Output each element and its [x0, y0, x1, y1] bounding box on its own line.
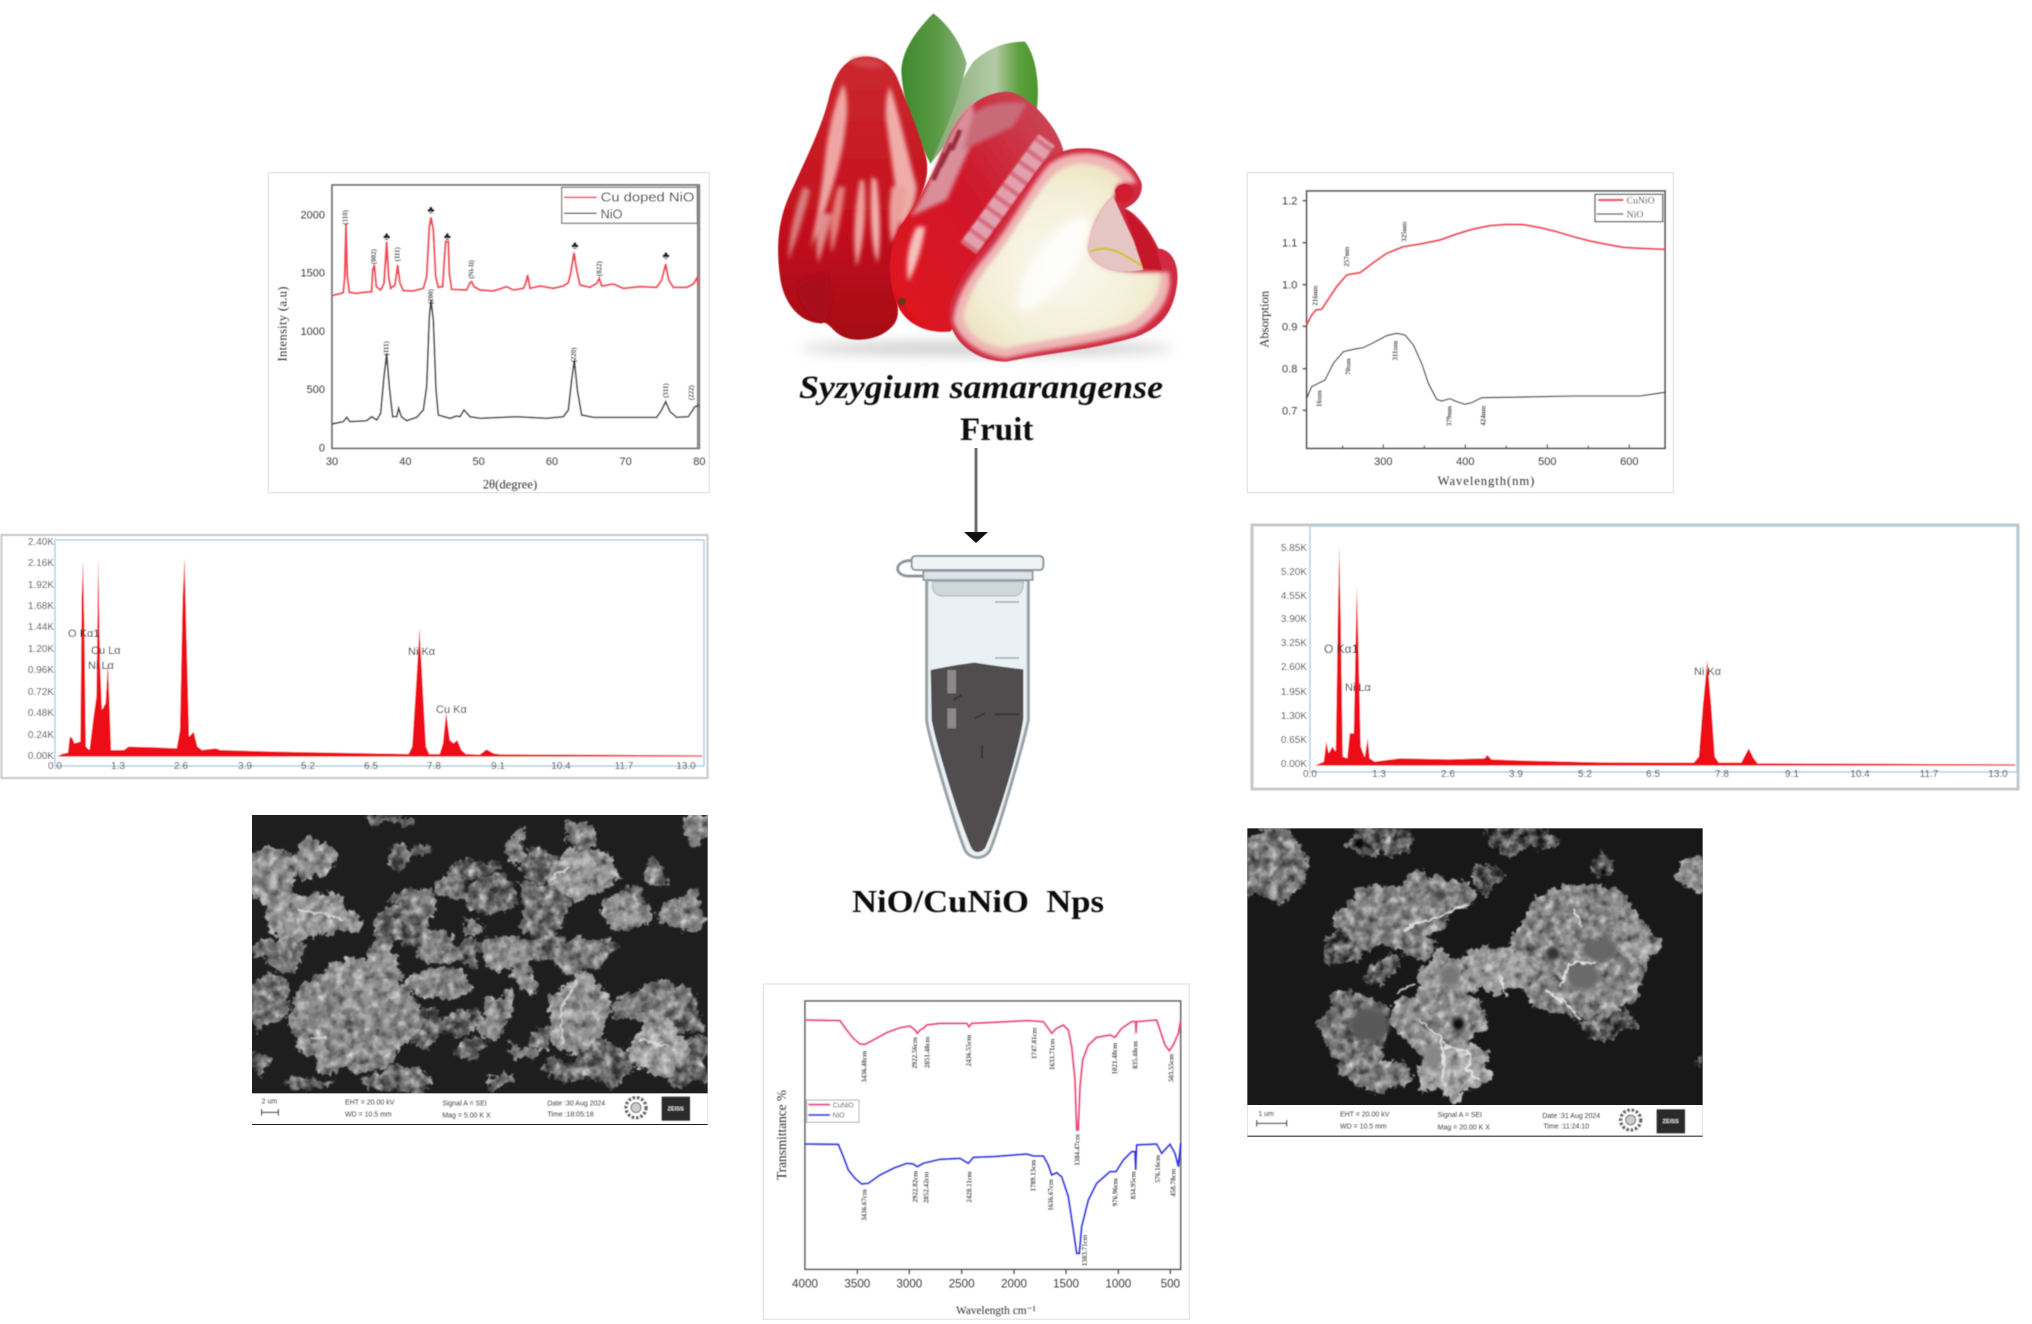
- panel: EDS spectrum of CuNiO: 2.16K: [28, 558, 54, 569]
- panel: UV-Vis absorption chart: Wavelength(nm): [1438, 474, 1534, 488]
- panel: XRD pattern chart: 1500: [301, 268, 325, 280]
- panel: EDS spectrum of CuNiO: 1.92K: [28, 580, 54, 591]
- panel: SEM micrograph of CuNiO: Mag = 5.00 K X: [442, 1112, 491, 1119]
- panel: UV-Vis absorption chart: 325nm: [1401, 221, 1409, 242]
- panel: EDS spectrum of NiO: 1.3: [1372, 769, 1386, 780]
- panel: XRD pattern chart: Cu doped NiO: [601, 191, 695, 205]
- panel: EDS spectrum of CuNiO: Cu Kα: [436, 704, 467, 716]
- panel: EDS spectrum of CuNiO: 0.24K: [28, 730, 54, 741]
- panel: UV-Vis absorption chart: 1.2: [1282, 196, 1297, 208]
- panel: SEM micrograph of NiO: Date :31 Aug 2024: [1542, 1113, 1600, 1120]
- panel: SEM micrograph of CuNiO: Time :18:05:18: [547, 1111, 594, 1118]
- heading: species name: Syzygium samarangense: [799, 370, 1163, 406]
- panel: XRD pattern chart: (111): [393, 246, 401, 262]
- panel: FTIR transmittance chart: 3000: [896, 1277, 923, 1290]
- panel: EDS spectrum of NiO: 11.7: [1920, 769, 1939, 780]
- panel: UV-Vis absorption chart: 0.9: [1282, 321, 1297, 333]
- panel: XRD pattern chart: NiO: [601, 207, 623, 221]
- panel: EDS spectrum of CuNiO: 13.0: [676, 761, 696, 772]
- panel: EDS spectrum of NiO: 3.90K: [1281, 614, 1307, 625]
- panel: EDS spectrum of NiO: Ni Lα: [1345, 682, 1372, 694]
- panel: EDS spectrum of CuNiO: 5.2: [301, 761, 315, 772]
- panel: EDS spectrum of NiO: 10.4: [1850, 769, 1870, 780]
- panel: XRD pattern chart: 60: [546, 456, 558, 468]
- panel: FTIR transmittance chart: 2500: [949, 1277, 975, 1290]
- panel: SEM micrograph of CuNiO: Date :30 Aug 2024: [547, 1101, 605, 1108]
- panel: EDS spectrum of CuNiO: 1.3: [111, 761, 125, 772]
- panel: EDS spectrum of CuNiO: 0.96K: [28, 665, 54, 676]
- panel: FTIR transmittance chart: 500: [1161, 1277, 1181, 1290]
- panel: EDS spectrum of NiO: 5.20K: [1281, 567, 1307, 578]
- panel: XRD pattern chart: ♣: [662, 250, 670, 262]
- panel: XRD pattern chart: Intensity (a.u): [276, 286, 290, 361]
- panel: EDS spectrum of CuNiO: 10.4: [551, 761, 571, 772]
- green leaves: [901, 13, 1038, 164]
- panel: UV-Vis absorption chart: 70nm: [1345, 358, 1353, 375]
- panel: EDS spectrum of CuNiO: Ni Lα: [88, 660, 115, 672]
- panel: XRD pattern chart: (200): [427, 288, 435, 304]
- panel: XRD pattern chart: ♣: [427, 204, 435, 216]
- panel: XRD pattern chart: 80: [693, 456, 705, 468]
- panel: UV-Vis absorption chart: 500: [1538, 456, 1556, 468]
- panel: FTIR transmittance chart: [763, 984, 1189, 1319]
- panel: FTIR transmittance chart: 458.78cm: [1169, 1168, 1177, 1197]
- panel: FTIR transmittance chart: 2852.42cm: [923, 1171, 931, 1203]
- panel: XRD pattern chart: [268, 173, 709, 493]
- panel: UV-Vis absorption chart: CuNiO: [1627, 196, 1655, 207]
- panel: FTIR transmittance chart: Wavelength cm⁻¹: [956, 1305, 1036, 1317]
- panel: FTIR transmittance chart: 3436.67cm: [860, 1189, 868, 1221]
- panel: SEM micrograph of CuNiO: EHT = 20.00 kV: [345, 1100, 395, 1107]
- icon: tube with NiO/CuNiO powder: [898, 556, 1043, 857]
- panel: EDS spectrum of NiO: 2.6: [1441, 769, 1455, 780]
- panel: EDS spectrum of CuNiO: 0.00K: [28, 751, 54, 762]
- panel: UV-Vis absorption chart: 600: [1620, 456, 1638, 468]
- panel: EDS spectrum of CuNiO: 7.8: [427, 761, 441, 772]
- panel: SEM micrograph of CuNiO: ZEISS: [667, 1106, 684, 1112]
- panel: FTIR transmittance chart: 1789.13cm: [1030, 1160, 1038, 1191]
- panel: EDS spectrum of NiO: Ni Kα: [1694, 666, 1722, 678]
- panel: XRD pattern chart: (022): [596, 260, 604, 276]
- panel: XRD pattern chart: (110): [341, 209, 349, 225]
- panel: XRD pattern chart: ♣: [383, 231, 391, 243]
- panel: EDS spectrum of NiO: 3.9: [1509, 769, 1523, 780]
- panel: UV-Vis absorption chart: 1.0: [1282, 280, 1297, 292]
- panel: EDS spectrum of NiO: 13.0: [1988, 769, 2008, 780]
- panel: XRD pattern chart: (222): [687, 384, 695, 400]
- arrow: fruit to nanoparticles: [964, 448, 988, 543]
- panel: EDS spectrum of NiO: 3.25K: [1281, 638, 1307, 649]
- panel: XRD pattern chart: (002): [370, 248, 378, 264]
- panel: SEM micrograph of CuNiO: Signal A = SEI: [442, 1100, 487, 1107]
- panel: XRD pattern chart: 2000: [301, 209, 325, 221]
- panel: SEM micrograph of CuNiO: [243, 813, 713, 1125]
- panel: FTIR transmittance chart: 4000: [792, 1277, 818, 1290]
- panel: FTIR transmittance chart: 2922.56cm: [911, 1037, 919, 1069]
- panel: EDS spectrum of CuNiO: 3.9: [238, 761, 252, 772]
- panel: FTIR transmittance chart: CuNiO: [833, 1102, 854, 1109]
- panel: FTIR transmittance chart: 1384.47cm: [1073, 1134, 1081, 1166]
- panel: FTIR transmittance chart: 976.96cm: [1112, 1178, 1120, 1206]
- panel: FTIR transmittance chart: 1633.71cm: [1048, 1038, 1056, 1070]
- panel: EDS spectrum of NiO: 1.30K: [1281, 711, 1307, 722]
- panel: SEM micrograph of CuNiO: 2 um: [262, 1098, 277, 1105]
- panel: EDS spectrum of CuNiO: 2.6: [174, 761, 188, 772]
- panel: UV-Vis absorption chart: 0.8: [1282, 364, 1297, 376]
- panel: UV-Vis absorption chart: 257nm: [1343, 246, 1351, 267]
- panel: FTIR transmittance chart: 1747.81cm: [1031, 1027, 1039, 1059]
- panel: EDS spectrum of CuNiO: 0.0: [48, 761, 62, 772]
- panel: XRD pattern chart: 0: [319, 442, 325, 454]
- panel: UV-Vis absorption chart: 300: [1374, 456, 1392, 468]
- panel: EDS spectrum of CuNiO: 6.5: [364, 761, 378, 772]
- panel: EDS spectrum of NiO: O Kα1: [1324, 642, 1359, 656]
- panel: SEM micrograph of NiO: Mag = 20.00 K X: [1438, 1124, 1490, 1131]
- panel: XRD pattern chart: (311): [662, 383, 670, 398]
- panel: EDS spectrum of NiO: [1252, 525, 2018, 789]
- heading: nanoparticle label: NiO/CuNiO Nps: [852, 883, 1104, 919]
- panel: FTIR transmittance chart: 1636.67cm: [1047, 1179, 1055, 1211]
- panel: EDS spectrum of CuNiO: Ni Kα: [408, 646, 436, 658]
- panel: EDS spectrum of CuNiO: 9.1: [491, 761, 505, 772]
- panel: EDS spectrum of NiO: 5.2: [1578, 769, 1592, 780]
- panel: UV-Vis absorption chart: [1247, 173, 1673, 493]
- panel: EDS spectrum of CuNiO: 0.72K: [28, 687, 54, 698]
- panel: EDS spectrum of CuNiO: O Kα1: [68, 628, 99, 640]
- panel: UV-Vis absorption chart: 311nm: [1391, 341, 1399, 361]
- panel: XRD pattern chart: 500: [307, 384, 325, 396]
- photo: Syzygium samarangense fruit: [778, 13, 1178, 362]
- panel: EDS spectrum of NiO: 0.0: [1303, 769, 1317, 780]
- panel: EDS spectrum of CuNiO: 11.7: [615, 761, 634, 772]
- panel: SEM micrograph of NiO: WD = 10.5 mm: [1340, 1124, 1387, 1131]
- panel: EDS spectrum of NiO: 1.95K: [1281, 687, 1307, 698]
- panel: UV-Vis absorption chart: 1.1: [1282, 238, 1297, 250]
- panel: XRD pattern chart: (111): [383, 340, 391, 356]
- panel: XRD pattern chart: ♣: [571, 240, 579, 252]
- panel: FTIR transmittance chart: 1500: [1053, 1277, 1079, 1290]
- panel: FTIR transmittance chart: 576.16cm: [1154, 1155, 1162, 1183]
- panel: SEM micrograph of NiO: [1233, 823, 1708, 1137]
- panel: XRD pattern chart: 2θ(degree): [483, 477, 537, 491]
- panel: EDS spectrum of NiO: 9.1: [1785, 769, 1799, 780]
- middle whole fruit: [890, 92, 1063, 332]
- panel: XRD pattern chart: 30: [326, 456, 338, 468]
- panel: SEM micrograph of NiO: ZEISS: [1662, 1119, 1679, 1125]
- panel: SEM micrograph of NiO: Time :11:24:10: [1543, 1124, 1589, 1131]
- panel: EDS spectrum of NiO: 7.8: [1715, 769, 1729, 780]
- panel: UV-Vis absorption chart: Absorption: [1257, 290, 1271, 348]
- panel: EDS spectrum of CuNiO: [2, 535, 708, 778]
- panel: EDS spectrum of NiO: 0.65K: [1281, 735, 1307, 746]
- cut fruit half: [948, 148, 1178, 362]
- panel: FTIR transmittance chart: Transmittance %: [774, 1090, 789, 1180]
- panel: FTIR transmittance chart: 2428.11cm: [965, 1171, 973, 1203]
- panel: EDS spectrum of CuNiO: 0.48K: [28, 708, 54, 719]
- panel: UV-Vis absorption chart: 216nm: [1311, 285, 1319, 306]
- panel: EDS spectrum of CuNiO: 2.40K: [28, 537, 54, 548]
- panel: XRD pattern chart: ♣: [444, 231, 452, 243]
- panel: SEM micrograph of NiO: EHT = 20.00 kV: [1340, 1112, 1390, 1119]
- heading: fruit label: Fruit: [960, 412, 1033, 448]
- panel: UV-Vis absorption chart: 16nm: [1315, 390, 1323, 407]
- panel: UV-Vis absorption chart: 424nm: [1479, 405, 1487, 426]
- panel: EDS spectrum of CuNiO: 1.20K: [28, 644, 54, 655]
- panel: EDS spectrum of CuNiO: 1.68K: [28, 601, 54, 612]
- panel: UV-Vis absorption chart: 0.7: [1282, 405, 1297, 417]
- ground shadow: [800, 341, 1173, 356]
- panel: UV-Vis absorption chart: 379nm: [1445, 406, 1453, 426]
- panel: FTIR transmittance chart: NiO: [833, 1113, 845, 1120]
- panel: XRD pattern chart: (220): [570, 347, 578, 363]
- panel: XRD pattern chart: (Ni-Ii): [467, 259, 475, 279]
- panel: FTIR transmittance chart: 2000: [1001, 1277, 1027, 1290]
- panel: FTIR transmittance chart: 1021.48cm: [1111, 1043, 1119, 1074]
- panel: FTIR transmittance chart: 503.55cm: [1167, 1054, 1175, 1082]
- panel: EDS spectrum of NiO: 5.85K: [1281, 543, 1307, 554]
- panel: FTIR transmittance chart: 3436.48cm: [860, 1051, 868, 1082]
- panel: FTIR transmittance chart: 1000: [1105, 1277, 1132, 1290]
- panel: FTIR transmittance chart: 2851.48cm: [923, 1036, 931, 1068]
- left whole fruit: [778, 57, 927, 340]
- panel: EDS spectrum of NiO: 6.5: [1646, 769, 1660, 780]
- panel: EDS spectrum of NiO: 2.60K: [1281, 662, 1307, 673]
- panel: FTIR transmittance chart: 834.95cm: [1129, 1171, 1137, 1199]
- panel: FTIR transmittance chart: 835.48cm: [1131, 1041, 1139, 1069]
- panel: XRD pattern chart: 50: [473, 456, 485, 468]
- panel: EDS spectrum of CuNiO: 1.44K: [28, 622, 54, 633]
- panel: EDS spectrum of CuNiO: Cu Lα: [91, 645, 121, 657]
- panel: XRD pattern chart: 1000: [301, 326, 325, 338]
- panel: SEM micrograph of NiO: Signal A = SEI: [1438, 1112, 1482, 1119]
- panel: FTIR transmittance chart: 2436.55cm: [965, 1035, 973, 1066]
- panel: SEM micrograph of CuNiO: WD = 10.5 mm: [345, 1112, 392, 1119]
- panel: EDS spectrum of NiO: 4.55K: [1281, 591, 1307, 602]
- panel: FTIR transmittance chart: 1383.71cm: [1081, 1234, 1089, 1266]
- panel: XRD pattern chart: 40: [399, 456, 411, 468]
- panel: EDS spectrum of NiO: 0.00K: [1281, 759, 1307, 770]
- panel: FTIR transmittance chart: 2922.82cm: [912, 1171, 920, 1202]
- panel: FTIR transmittance chart: 3500: [844, 1277, 871, 1290]
- panel: XRD pattern chart: 70: [620, 456, 632, 468]
- panel: UV-Vis absorption chart: NiO: [1627, 209, 1643, 220]
- panel: SEM micrograph of NiO: 1 um: [1258, 1111, 1274, 1118]
- panel: UV-Vis absorption chart: 400: [1456, 456, 1474, 468]
